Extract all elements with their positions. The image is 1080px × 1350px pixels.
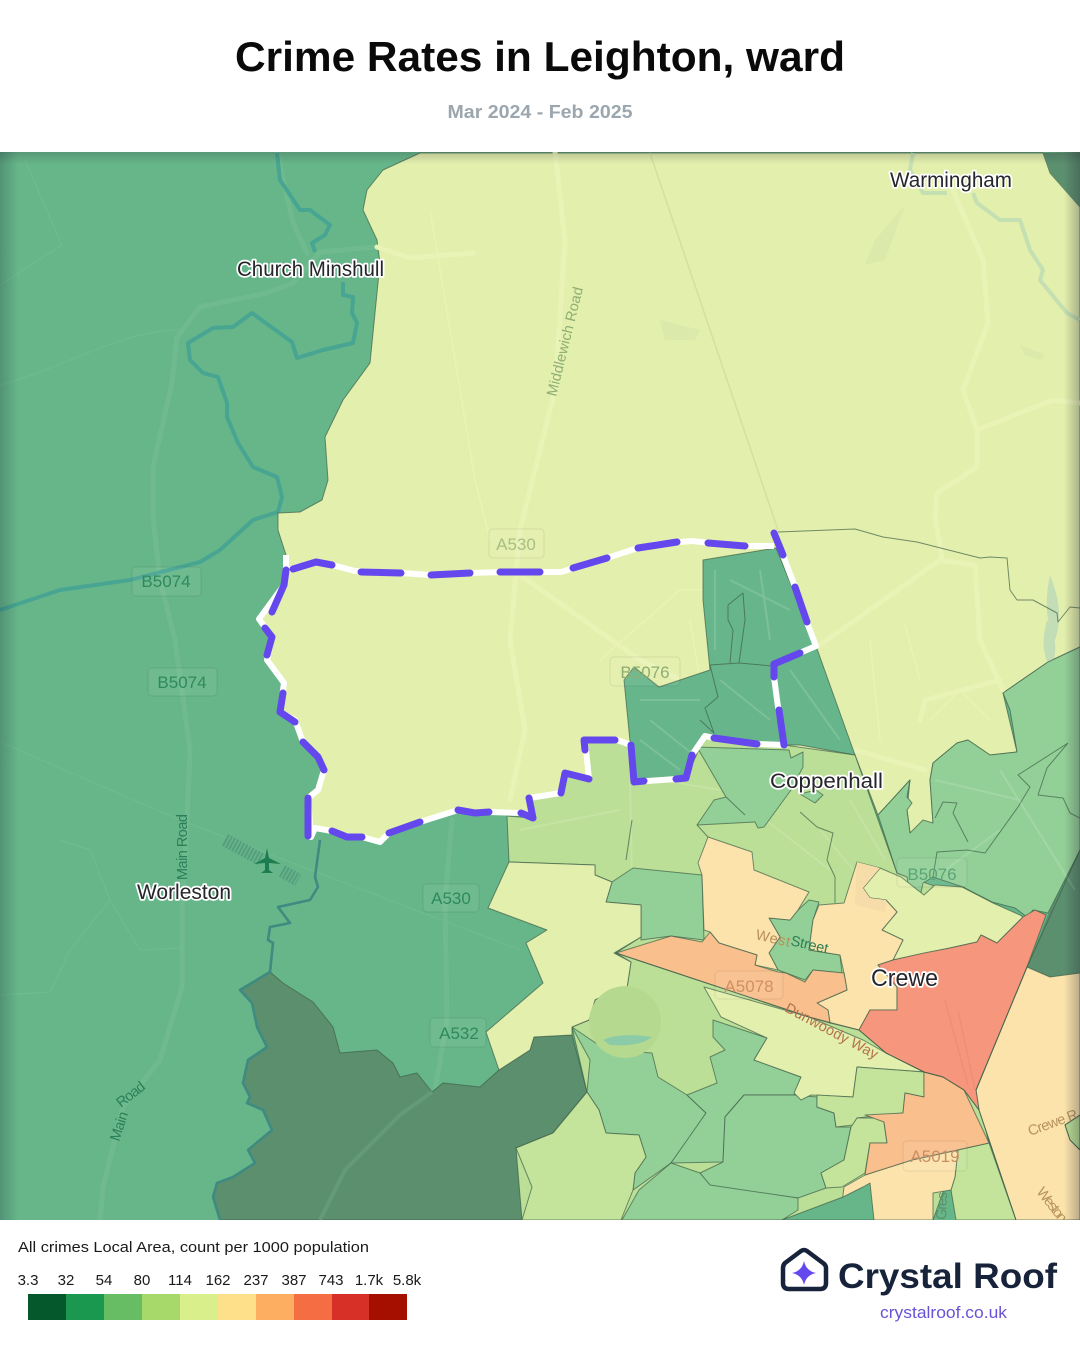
green polygon bottom <box>782 1183 874 1220</box>
legend tick labels: 237 <box>243 1272 269 1289</box>
road shields: B5076 <box>907 865 957 884</box>
river west <box>0 153 357 610</box>
road shields: A530 <box>496 535 536 554</box>
subtitle: date range: Mar 2024 - Feb 2025 <box>448 101 632 122</box>
road shields: B5076 <box>620 663 670 682</box>
road name labels: Street <box>789 933 830 957</box>
road name labels: Gres <box>934 1192 951 1220</box>
Leighton ward boundary <box>259 533 816 842</box>
website url: crystalroof.co.uk <box>880 1304 1008 1322</box>
road shields <box>132 529 967 1171</box>
place labels: Church Minshull <box>237 258 384 281</box>
road name labels <box>108 285 1080 1226</box>
pale yellow polygons <box>486 862 1023 1100</box>
medium green polygons <box>572 747 851 1220</box>
road name labels: Main <box>108 1110 132 1143</box>
legend tick labels: 743 <box>318 1272 344 1289</box>
road shields: A5078 <box>724 977 774 996</box>
road name labels: Crewe R <box>1026 1107 1080 1140</box>
title: Crime Rates in Leighton, ward <box>235 33 845 80</box>
dark green areas <box>213 972 587 1220</box>
place labels: Coppenhall <box>770 770 883 793</box>
airfield <box>225 840 298 880</box>
place labels: Crewe <box>871 965 938 992</box>
orange polygons <box>616 932 989 1175</box>
legend tick labels <box>18 1272 422 1289</box>
logo: Crystal Roof: Crystal Roof <box>838 1257 1057 1296</box>
road shields: A532 <box>439 1024 479 1043</box>
road shields: A5019 <box>910 1147 960 1166</box>
yellow area: north and Leighton <box>259 153 1080 842</box>
legend title: All crimes Local Area, count per 1000 population <box>18 1239 369 1256</box>
road name labels: Dunwoody Way <box>782 1000 881 1063</box>
place labels: Worleston <box>137 881 231 904</box>
right side medium green <box>878 647 1080 917</box>
boating lake and park <box>589 986 652 1058</box>
place labels <box>137 169 1012 992</box>
road shields: B5074 <box>157 673 207 692</box>
road name labels: Middlewich Road <box>544 285 587 398</box>
legend <box>18 1239 422 1320</box>
road name labels: West <box>754 927 792 951</box>
legend tick labels: 32 <box>58 1272 74 1289</box>
road name labels: Main Road <box>175 814 191 880</box>
road shields: A530 <box>431 889 471 908</box>
road name labels: Weston <box>1033 1185 1070 1226</box>
legend tick labels: 54 <box>96 1272 112 1289</box>
choropleth map <box>0 152 1080 1226</box>
estate polygon: Leighton green <box>624 548 855 782</box>
road name labels: Road <box>114 1079 149 1111</box>
tan polygons <box>698 837 1080 1220</box>
icon: house with star <box>783 1250 826 1289</box>
legend colour ramp <box>28 1294 407 1320</box>
logo: Crystal Roof <box>783 1250 1057 1322</box>
place labels: Warmingham <box>890 169 1012 192</box>
legend tick labels: 80 <box>134 1272 150 1289</box>
legend tick labels: 114 <box>168 1272 192 1289</box>
light green polygons <box>516 1067 1016 1220</box>
roads in yellow area <box>377 152 1080 800</box>
legend tick labels: 3.3 <box>18 1272 38 1289</box>
legend tick labels: 162 <box>205 1272 231 1289</box>
road shields: B5074 <box>141 572 191 591</box>
legend tick labels: 1.7k <box>355 1272 384 1289</box>
map edge shading <box>0 152 1080 1220</box>
legend tick labels: 5.8k <box>393 1272 422 1289</box>
legend tick labels: 387 <box>281 1272 307 1289</box>
salmon polygon: Crewe centre <box>859 910 1046 1110</box>
south urban base: light green <box>507 736 1023 1220</box>
